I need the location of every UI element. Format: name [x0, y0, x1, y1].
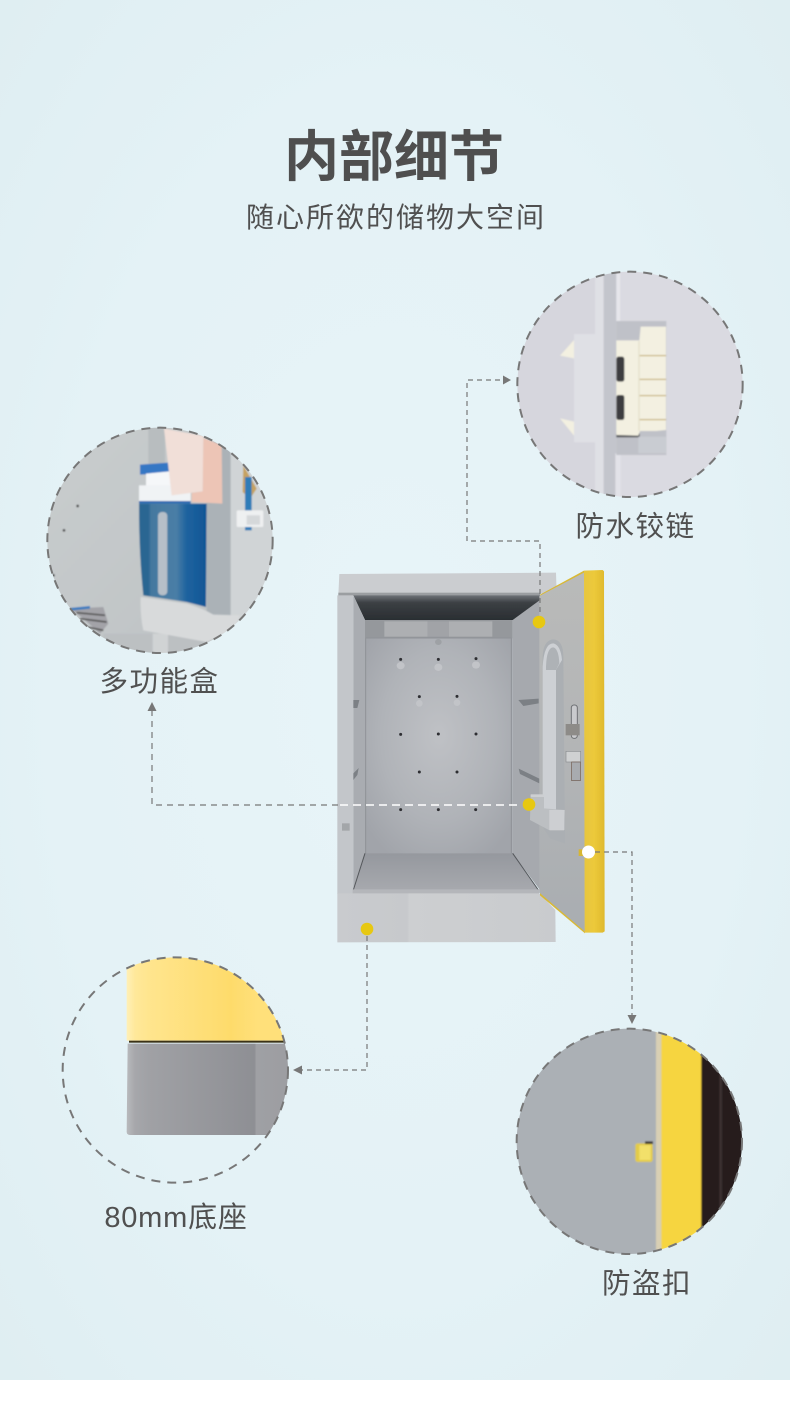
latch — [635, 1143, 653, 1162]
door yellow strip — [584, 570, 605, 933]
hole dimples — [397, 639, 480, 707]
magazines — [70, 607, 108, 634]
detail circle: anti-theft latch — [516, 1028, 743, 1255]
connector: base — [293, 936, 367, 1074]
yellow door bottom — [126, 957, 283, 1041]
door hardware — [243, 465, 257, 499]
right inner wall — [513, 600, 540, 890]
subtitle: 随心所欲的储物大空间 — [246, 202, 546, 233]
mounting holes — [399, 657, 477, 811]
towel — [192, 438, 222, 504]
hinge cutout — [616, 321, 666, 455]
door panel — [539, 573, 585, 932]
door frame rib — [596, 276, 603, 494]
left post — [337, 595, 353, 894]
door recess — [543, 639, 565, 843]
upper back band — [365, 620, 513, 639]
anti-theft latch — [579, 849, 583, 856]
connector: multifunction box — [148, 702, 522, 805]
detail circle: base — [63, 950, 295, 1183]
storage box on door — [530, 794, 565, 831]
label: base: 80mm底座 — [104, 1201, 248, 1234]
wall holes — [76, 505, 79, 507]
door yellow side edge — [540, 571, 584, 597]
locker top cap — [338, 573, 557, 595]
arrow to multifunction box — [148, 702, 156, 711]
bottle — [139, 504, 207, 607]
bottle cap — [140, 463, 169, 475]
back wall — [365, 638, 513, 854]
base plinth — [337, 893, 556, 942]
white box — [103, 634, 223, 664]
title: 内部细节 — [284, 126, 504, 188]
floor — [353, 853, 539, 891]
shelf clips — [353, 699, 539, 783]
label: multifunction box: 多功能盒 — [99, 666, 220, 698]
arrow to anti-theft latch — [628, 1015, 636, 1024]
detail circle: multifunction box — [46, 426, 274, 654]
connector: anti-theft latch — [595, 852, 636, 1024]
connector: hinge — [467, 376, 540, 612]
arrow to base — [293, 1066, 302, 1074]
arrow to hinge — [503, 376, 511, 384]
ceiling of interior — [353, 595, 540, 620]
left inner wall — [353, 595, 365, 890]
left clip tab — [560, 340, 574, 436]
detail circle: hinge — [516, 270, 744, 498]
locker photo — [337, 570, 605, 942]
label: anti-theft latch: 防盗扣 — [602, 1268, 692, 1300]
grey plinth — [127, 1044, 295, 1135]
door lock hasp — [566, 705, 581, 781]
ivory hinge — [616, 327, 666, 436]
label: hinge: 防水铰链 — [575, 511, 696, 543]
marker dots — [361, 616, 595, 935]
